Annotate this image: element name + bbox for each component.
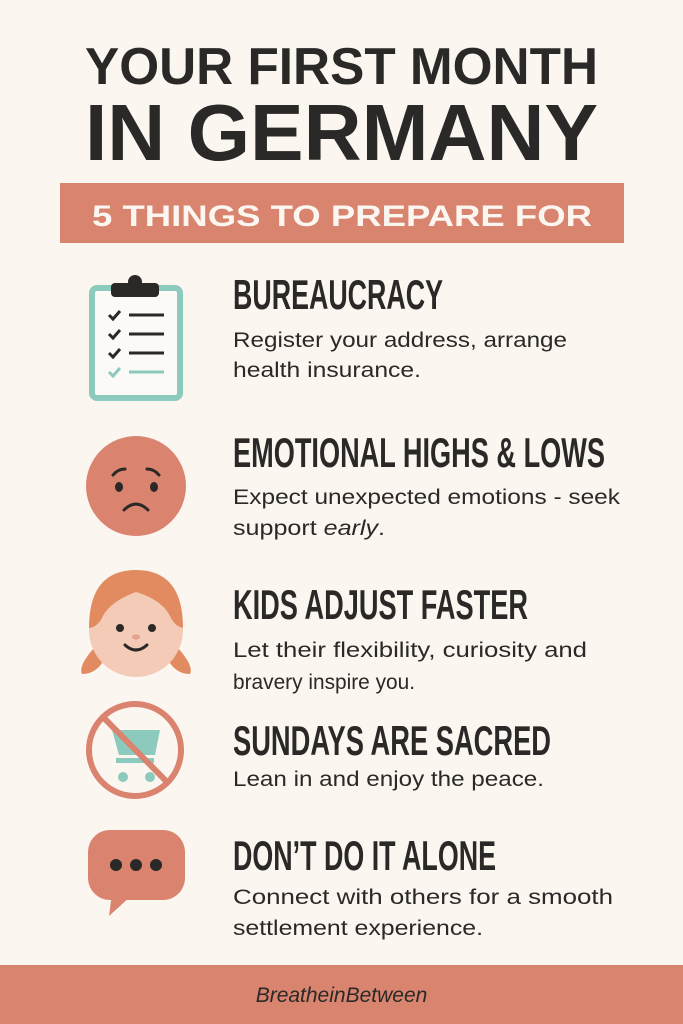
item 2 [233,429,621,540]
banner [60,183,624,243]
item 2: Expect unexpected emotions - seek [233,486,621,509]
item 3: Let their flexibility, curiosity and [233,639,587,662]
icon: girl [81,570,191,677]
item 1: health insurance. [233,359,421,382]
item 5: DON’T DO IT ALONE [233,832,496,879]
item 5: Connect with others for a smooth [233,886,613,909]
footer: BreatheinBetween [256,984,427,1007]
icon: sad face [86,436,186,536]
item 3: KIDS ADJUST FASTER [233,581,528,628]
icon: chat bubble [88,830,185,916]
icon: clipboard [92,275,180,398]
item 1 [233,271,567,382]
item 3: bravery inspire you. [233,671,415,694]
item 5 [233,832,613,940]
banner: 5 THINGS TO PREPARE FOR [92,200,592,233]
item 1: Register your address, arrange [233,329,567,352]
footer [0,965,683,1024]
icon: no shopping [89,704,181,796]
items text [233,271,621,940]
item 4: Lean in and enjoy the peace. [233,768,544,791]
title: YOUR FIRST MONTH [85,38,598,96]
item 4 [233,717,551,791]
item 3 [233,581,587,694]
item 1: BUREAUCRACY [233,271,443,318]
title: IN GERMANY [85,88,598,177]
item 5: settlement experience. [233,917,483,940]
item 2: support early . [233,517,385,540]
title [85,38,598,177]
